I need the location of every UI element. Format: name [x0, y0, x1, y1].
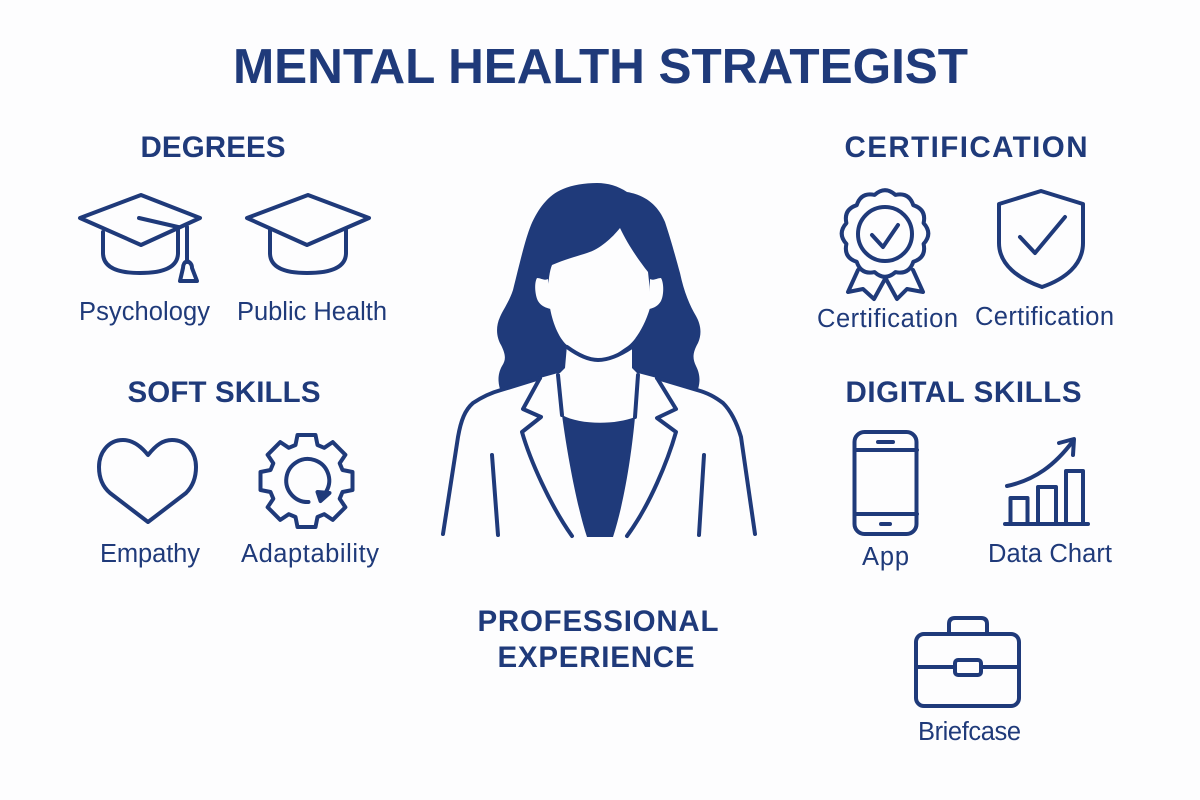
label: psychology: Psychology [79, 298, 210, 326]
icon: award rosette [842, 190, 928, 299]
central figure: woman in blazer [443, 183, 755, 537]
icon: graduation cap with tassel [80, 195, 200, 281]
blazer outlines [443, 347, 755, 536]
label: data chart: Data Chart [988, 540, 1112, 568]
icon: bar chart with arrow [1005, 439, 1088, 524]
icon: shield with check [999, 191, 1083, 287]
heading: digital skills: DIGITAL SKILLS [846, 376, 1082, 409]
heading: degrees: DEGREES [140, 131, 286, 164]
label: certification: Certification [975, 303, 1114, 331]
icon: heart [99, 440, 196, 522]
icon: gear with cycle arrow [260, 435, 352, 527]
icon: briefcase [916, 618, 1019, 706]
icon: graduation cap [247, 195, 369, 273]
heading: professional experience: EXPERIENCE [498, 641, 694, 674]
blouse [562, 415, 635, 537]
heading: professional experience: PROFESSIONAL [478, 605, 718, 638]
label: certification: Certification [817, 305, 958, 333]
neck fill over hair edge [566, 347, 632, 376]
blazer body fill [443, 373, 755, 534]
hair [497, 183, 700, 392]
label: empathy: Empathy [100, 540, 200, 568]
label: adaptability: Adaptability [241, 540, 379, 568]
title: MENTAL HEALTH STRATEGIST [233, 39, 968, 94]
icon: smartphone [854, 432, 917, 534]
heading: professional experience [478, 605, 718, 674]
label: public health: Public Health [237, 298, 387, 326]
face and ears [535, 228, 663, 415]
heading: certification: CERTIFICATION [844, 131, 1088, 164]
label: app: App [862, 543, 909, 571]
heading: soft skills: SOFT SKILLS [128, 376, 320, 409]
label: briefcase: Briefcase [918, 718, 1021, 746]
